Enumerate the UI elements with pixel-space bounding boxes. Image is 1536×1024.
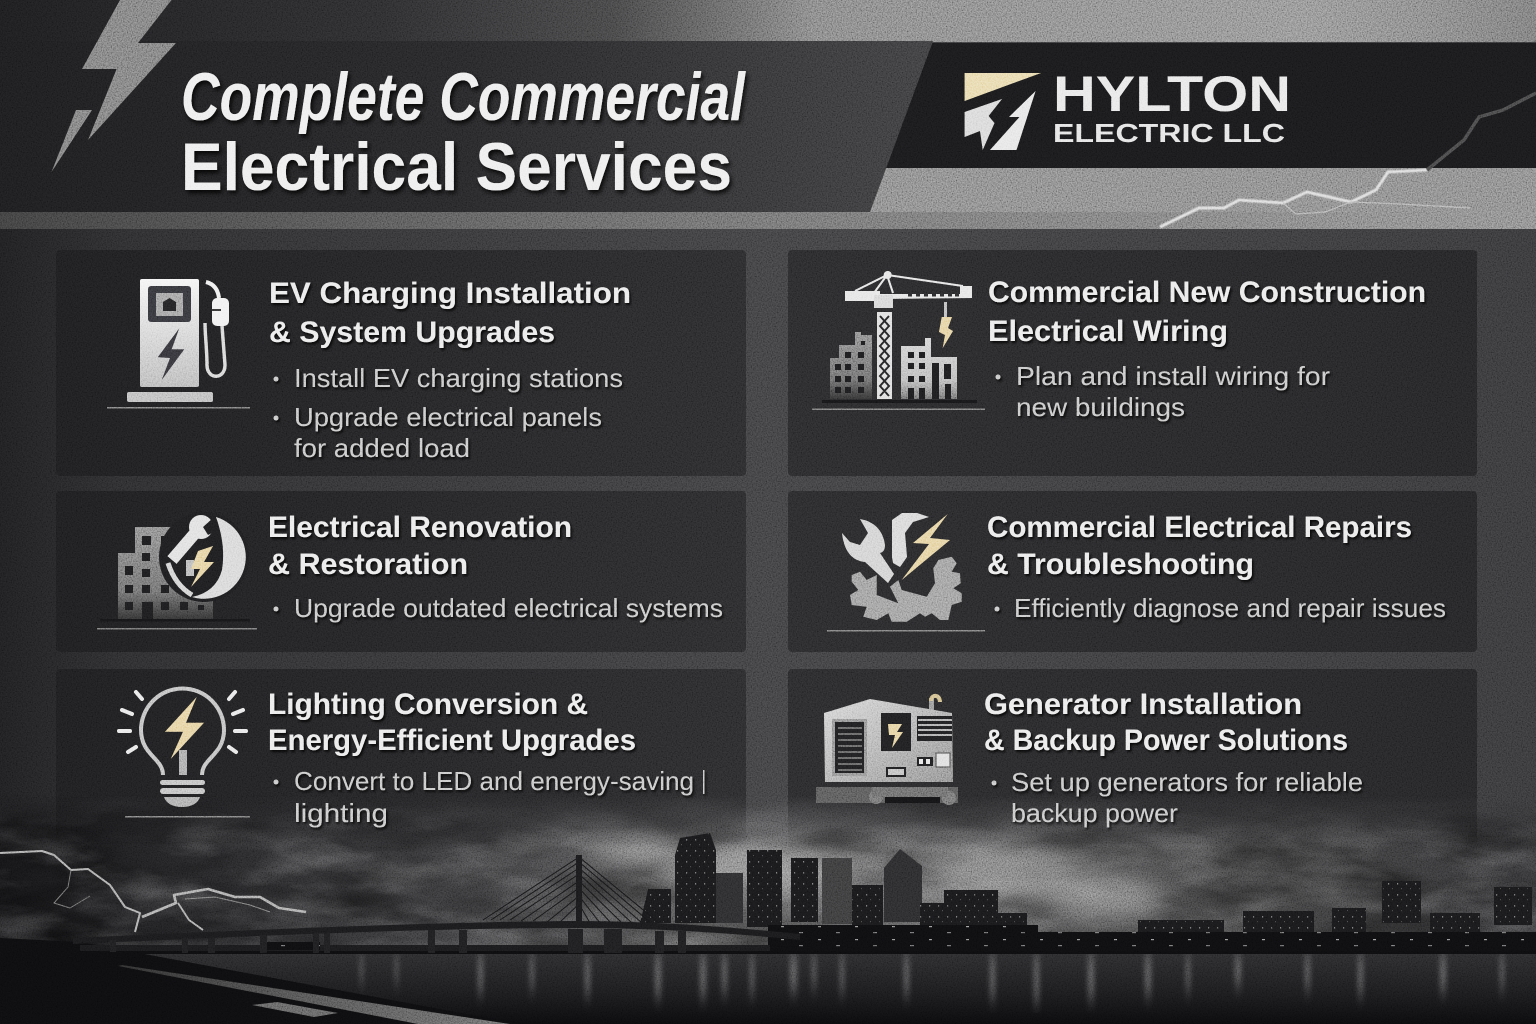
icon: wrench, hammer, gear and bolt: [827, 513, 985, 632]
heading: Electrical Renovation: [268, 511, 572, 544]
panel: repairs card background: [788, 491, 1477, 652]
heading: Lighting Conversion &: [268, 688, 588, 721]
bullet list: Install EV charging stations: [294, 363, 623, 393]
icon: light bulb with bolt: [119, 688, 250, 818]
skyline: city buildings: [640, 833, 1532, 935]
bullet list: [992, 767, 1363, 828]
icon: header lightning bolt: [52, 0, 176, 172]
bullet list: [274, 363, 623, 463]
header: top storm band: [0, 0, 1536, 42]
heading: & Restoration: [268, 548, 468, 581]
bullet list: new buildings: [1016, 392, 1185, 422]
panel: generator card background: [788, 669, 1477, 844]
panel: new construction card background: [788, 250, 1477, 476]
heading: Commercial Electrical Repairs: [987, 511, 1412, 544]
water: [0, 952, 1536, 1024]
water reflections: [360, 955, 1504, 1003]
bullet list: [274, 766, 704, 828]
card 5: lighting: [119, 688, 704, 828]
card 4: repairs: [827, 511, 1446, 632]
bullet list: for added load: [294, 433, 470, 463]
heading: Commercial New Construction: [988, 276, 1426, 309]
bullet list: lighting: [294, 798, 388, 828]
panel: renovation card background: [56, 491, 746, 652]
heading: [984, 688, 1348, 757]
panel: EV charging card background: [56, 250, 746, 476]
heading: Energy-Efficient Upgrades: [268, 724, 636, 757]
card 2: new construction: [812, 271, 1426, 422]
header: logo band: [886, 43, 1536, 170]
header: title panel: [0, 41, 933, 212]
heading: Generator Installation: [984, 688, 1302, 721]
title: Electrical Services: [181, 129, 732, 205]
logo: Hylton Electric LLC: HYLTON: [1053, 66, 1291, 122]
bullet list: backup power: [1011, 798, 1178, 828]
bullet list: Set up generators for reliable: [1011, 767, 1363, 797]
heading: & Backup Power Solutions: [984, 724, 1348, 757]
icon: crane and buildings: [812, 271, 985, 410]
heading: [988, 276, 1426, 348]
heading: [268, 688, 636, 757]
lightning over the bridge: [0, 851, 306, 932]
road foreground: [0, 938, 520, 1024]
card 1: EV charging: [107, 277, 631, 463]
heading: Electrical Wiring: [988, 315, 1228, 348]
bullet list: Plan and install wiring for: [1016, 361, 1330, 391]
header: lower grey band with lightning: [0, 165, 1536, 229]
heading: EV Charging Installation: [269, 277, 631, 310]
logo: Hylton Electric LLC: ELECTRIC LLC: [1053, 118, 1285, 148]
icon: EV charging station: [107, 279, 250, 408]
bullet list: Upgrade electrical panels: [294, 402, 602, 432]
panel: lighting card background: [56, 669, 746, 844]
heading: & System Upgrades: [269, 316, 555, 349]
card 3: renovation: [97, 511, 723, 630]
skyline: shoreline lights: [0, 925, 1536, 954]
heading: [987, 511, 1412, 581]
heading: [269, 277, 631, 349]
logo: Hylton Electric LLC: [965, 66, 1291, 150]
bullet list: Convert to LED and energy-saving: [294, 766, 694, 796]
bullet list: Upgrade outdated electrical systems: [294, 593, 723, 623]
title: [181, 59, 747, 205]
storm sky: [0, 800, 1536, 945]
bridge: [73, 855, 800, 953]
icon: building with wrench and gear: [97, 512, 257, 630]
heading: [268, 511, 572, 581]
card 6: generator: [816, 688, 1363, 828]
bullet list: [996, 361, 1330, 422]
icon: backup generator: [816, 696, 958, 805]
bullet list: Efficiently diagnose and repair issues: [1014, 593, 1446, 623]
title: Complete Commercial: [181, 59, 747, 135]
heading: & Troubleshooting: [987, 548, 1254, 581]
